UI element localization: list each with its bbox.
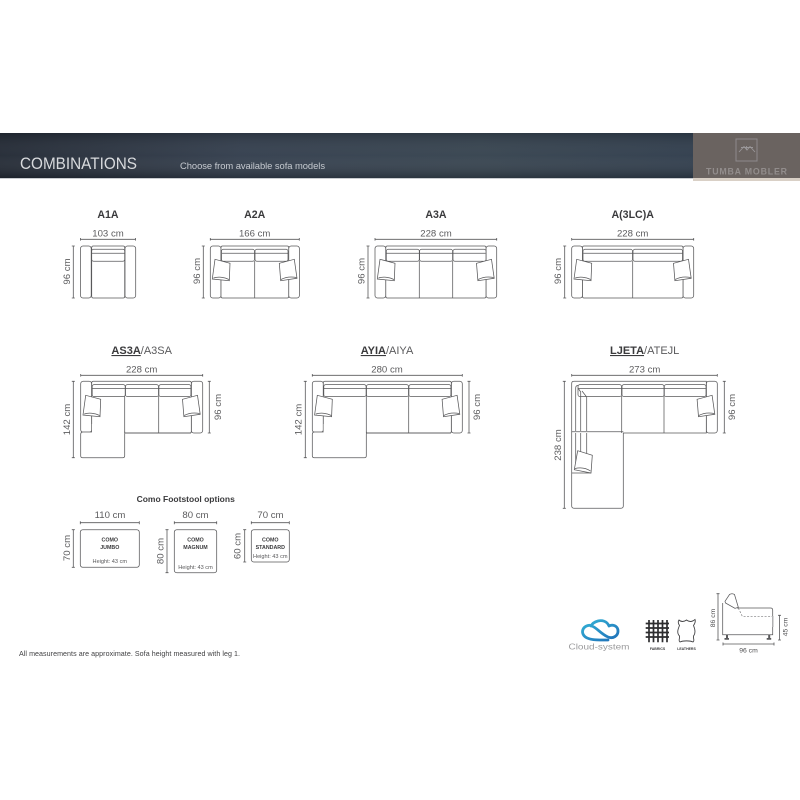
footnote: All measurements are approximate. Sofa height measured with leg 1. — [19, 650, 240, 658]
sofa AYIA: 142 cm — [294, 404, 304, 435]
sofa A2A: 166 cm — [239, 228, 270, 240]
icon: cloud system — [568, 621, 630, 652]
sofa LJETA — [553, 345, 738, 508]
sofa A(3LC)A: 96 cm — [553, 258, 564, 284]
title AYIA: AYIA/AIYA — [361, 345, 414, 357]
side profile diagram: 96 cm — [739, 647, 758, 654]
title A3A: A3A — [425, 209, 447, 221]
sofa AS3A: 142 cm — [62, 404, 73, 435]
footstool Como Standard: 60 cm — [232, 533, 244, 559]
sofa A1A: 103 cm — [92, 228, 124, 240]
footstool Como Standard — [232, 510, 289, 562]
icon: fabrics — [646, 620, 669, 651]
sofa AS3A: 96 cm — [213, 394, 224, 420]
sofa LJETA: 96 cm — [727, 394, 738, 420]
title LJETA: LJETA/ATEJL — [610, 345, 679, 357]
icon: leathers: LEATHERS — [677, 647, 696, 651]
footstool Como Jumbo: Height: 43 cm — [93, 559, 127, 565]
footstool heading: Como Footstool options — [137, 494, 235, 504]
footstool Como Magnum: 80 cm — [182, 510, 209, 521]
title A(3LC)A: A(3LC)A — [612, 209, 654, 221]
footstool Como Jumbo — [62, 510, 139, 567]
sofa A3A: 96 cm — [356, 258, 368, 284]
sofa A3A: 228 cm — [420, 228, 452, 240]
footstool Como Magnum: MAGNUM — [183, 545, 208, 551]
header banner — [0, 133, 800, 179]
sofa A2A: 96 cm — [192, 258, 203, 284]
sofa AYIA: 96 cm — [472, 394, 483, 420]
side profile diagram: 86 cm — [710, 608, 717, 627]
sofa A2A — [192, 209, 299, 298]
logo panel — [693, 133, 800, 181]
sofa A1A — [62, 209, 136, 298]
footstool Como Jumbo: 110 cm — [95, 510, 125, 521]
sofa A3A — [356, 209, 497, 298]
sofa LJETA: 273 cm — [629, 364, 660, 376]
title AS3A: AS3A/A3SA — [111, 345, 173, 357]
side profile diagram — [710, 594, 790, 654]
sofa A1A: 96 cm — [62, 258, 73, 285]
footstool Como Magnum: 80 cm — [156, 538, 166, 564]
icon: leathers — [677, 620, 696, 651]
footstool Como Jumbo: 70 cm — [62, 535, 73, 561]
logo panel: TUMBA MOBLER — [706, 166, 788, 176]
sofa AS3A — [62, 345, 224, 458]
footstool Como Standard: COMO — [262, 538, 279, 544]
header subtitle: Choose from available sofa models — [180, 160, 325, 171]
sofa LJETA: 238 cm — [553, 429, 564, 461]
sofa A(3LC)A: 228 cm — [617, 228, 648, 240]
heading: combinations: COMBINATIONS — [20, 154, 137, 173]
footstool Como Standard: Height: 43 cm — [253, 554, 288, 560]
title A1A: A1A — [97, 209, 119, 221]
footstool Como Standard: 70 cm — [257, 510, 284, 521]
side profile diagram: 45 cm — [782, 617, 790, 636]
footstool Como Standard: STANDARD — [256, 545, 285, 551]
sofa A(3LC)A — [553, 209, 694, 298]
sofa AS3A: 228 cm — [126, 364, 157, 376]
footstool Como Jumbo: COMO — [102, 538, 118, 544]
footstool Como Jumbo: JUMBO — [100, 545, 119, 551]
sofa AYIA: 280 cm — [371, 364, 403, 376]
footstool Como Magnum — [156, 510, 217, 573]
footstool Como Magnum: Height: 43 cm — [178, 565, 213, 571]
footstool Como Magnum: COMO — [187, 538, 204, 544]
sofa AYIA — [294, 345, 483, 458]
icon: cloud system: Cloud-system — [568, 642, 630, 652]
icon: fabrics: FABRICS — [650, 647, 666, 651]
title A2A: A2A — [244, 209, 266, 221]
